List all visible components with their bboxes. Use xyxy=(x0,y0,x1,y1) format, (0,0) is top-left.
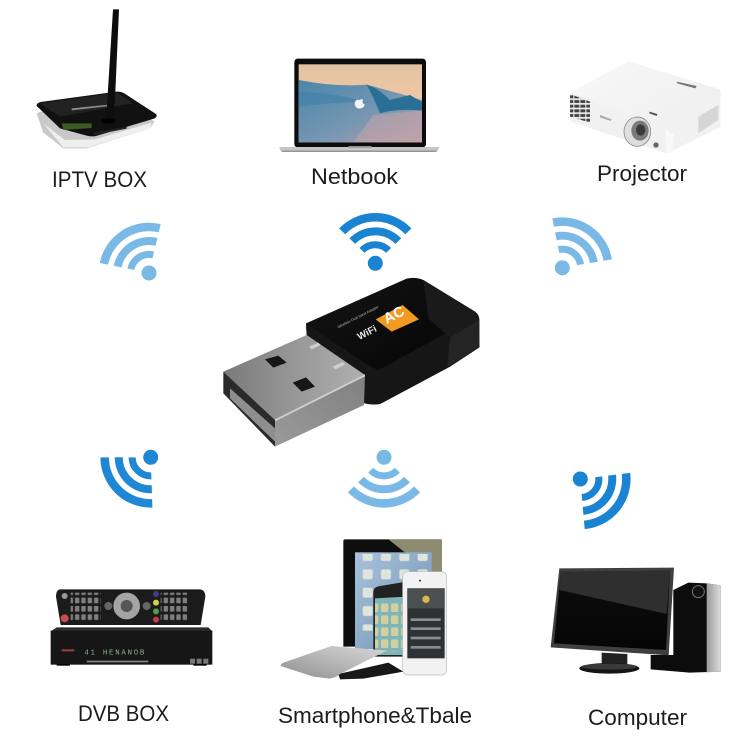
USB plug top face xyxy=(223,335,365,420)
plug opening xyxy=(223,372,275,447)
icon: tablet, phones and slim laptop xyxy=(281,539,447,679)
label: Computer: Computer xyxy=(588,705,687,730)
plug holes xyxy=(265,343,345,392)
small product text: Wireless Dual band Adapter xyxy=(337,305,380,329)
label: DVB BOX: DVB BOX xyxy=(78,701,169,726)
orange AC badge xyxy=(376,305,419,332)
wifi icon: top centre xyxy=(342,217,408,271)
label: Netbook: Netbook xyxy=(311,164,399,189)
wifi icon: bottom right xyxy=(554,449,637,534)
wifi icon: bottom centre xyxy=(351,450,417,503)
housing front edge highlight xyxy=(306,316,479,404)
label: IPTV BOX: IPTV BOX xyxy=(52,167,147,192)
panel: IPTV BOX xyxy=(37,9,157,192)
icon: IPTV box with antenna xyxy=(37,9,157,148)
panel: Smartphone and tablet xyxy=(278,539,472,728)
badge text: AC xyxy=(381,304,408,328)
wifi icon: top left xyxy=(96,216,181,297)
wifi icon: top right xyxy=(531,211,616,293)
label: Smartphone&Tbale: Smartphone&Tbale xyxy=(278,703,472,728)
panel: USB WiFi dongle xyxy=(223,278,479,447)
panel: Computer xyxy=(551,568,721,730)
plug right face xyxy=(275,375,365,447)
dongle black housing xyxy=(306,278,479,404)
icon: remote and set-top box xyxy=(51,589,212,666)
icon: apple logo xyxy=(355,99,365,109)
icon: monitor and tower xyxy=(551,568,721,674)
panel: Netbook xyxy=(279,59,439,189)
panel: Projector xyxy=(570,61,721,186)
wifi logo text: WiFi xyxy=(356,324,379,343)
display readout: 41 HENANOB xyxy=(84,650,145,658)
wifi icon: bottom left xyxy=(95,429,180,513)
icon: white projector xyxy=(570,61,721,153)
icon: laptop with wave wallpaper xyxy=(279,59,439,152)
panel: DVB BOX xyxy=(51,589,212,726)
label: Projector: Projector xyxy=(597,161,687,186)
housing end cap xyxy=(423,280,479,337)
